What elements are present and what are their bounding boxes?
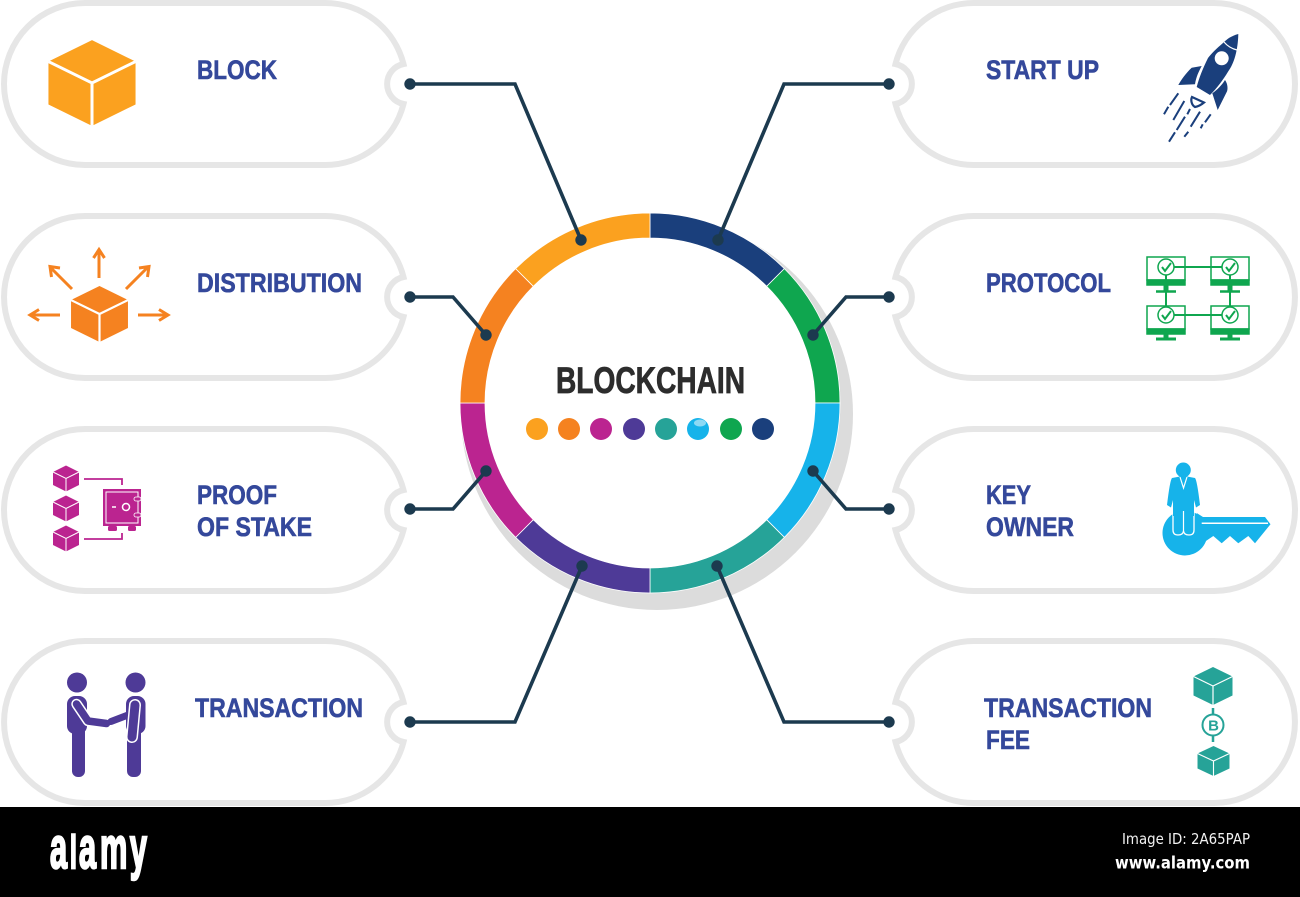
panel outline xyxy=(896,216,1295,378)
panel outline xyxy=(4,641,403,803)
panel outline xyxy=(896,641,1295,803)
website: www.alamy.com xyxy=(1115,854,1250,874)
label: transaction fee: FEE xyxy=(986,725,1030,755)
panel outline xyxy=(4,216,403,378)
image id: Image ID: 2A65PAP xyxy=(1122,830,1250,848)
ring shadow xyxy=(461,218,853,610)
label: key owner xyxy=(986,480,1074,542)
label: transaction: TRANSACTION xyxy=(195,693,363,723)
icon: networked monitors xyxy=(1147,257,1249,339)
panel: key owner xyxy=(896,429,1295,591)
panel: start up xyxy=(896,3,1295,165)
icon: cube xyxy=(48,40,136,126)
label: transaction fee xyxy=(984,693,1152,755)
panel: proof of stake xyxy=(4,429,404,591)
label: key owner: OWNER xyxy=(986,512,1074,542)
icon: handshake xyxy=(67,672,146,777)
label: distribution: DISTRIBUTION xyxy=(197,268,362,298)
panel outline xyxy=(896,3,1295,165)
icon: rocket xyxy=(1164,34,1238,142)
panel outline xyxy=(4,3,404,165)
icon: cube with outgoing arrows xyxy=(30,250,168,342)
label: transaction fee: TRANSACTION xyxy=(984,693,1152,723)
colour dots row xyxy=(526,418,774,440)
icon: cubes and safe xyxy=(53,466,141,552)
footer bar xyxy=(0,807,1300,897)
label: proof of stake: OF STAKE xyxy=(197,512,312,542)
panel: transaction fee xyxy=(896,641,1295,803)
footer logo: a xyxy=(79,816,97,880)
icon: cubes with bitcoin xyxy=(1194,667,1232,776)
panel: transaction xyxy=(4,641,403,803)
panel outline xyxy=(4,429,404,591)
label: proof of stake: PROOF xyxy=(197,480,277,510)
panel: block xyxy=(4,3,404,165)
connectors xyxy=(404,78,895,728)
panel: distribution xyxy=(4,216,403,378)
central ring xyxy=(460,213,853,610)
panel: protocol xyxy=(896,216,1295,378)
label: proof of stake xyxy=(197,480,312,542)
ring centre xyxy=(485,238,815,568)
icon: cubes with bitcoin: B xyxy=(1208,718,1219,734)
label: key owner: KEY xyxy=(986,480,1031,510)
panel outline xyxy=(896,429,1295,591)
icon: person on key xyxy=(1162,462,1270,556)
footer logo: y xyxy=(130,816,147,880)
footer logo: l xyxy=(70,827,77,878)
footer logo: a xyxy=(50,816,68,880)
label: block: BLOCK xyxy=(197,55,277,85)
ring segments xyxy=(460,213,840,593)
footer logo: m xyxy=(100,816,127,880)
title: BLOCKCHAIN xyxy=(556,360,745,401)
label: start up: START UP xyxy=(986,55,1099,85)
label: protocol: PROTOCOL xyxy=(986,268,1111,298)
